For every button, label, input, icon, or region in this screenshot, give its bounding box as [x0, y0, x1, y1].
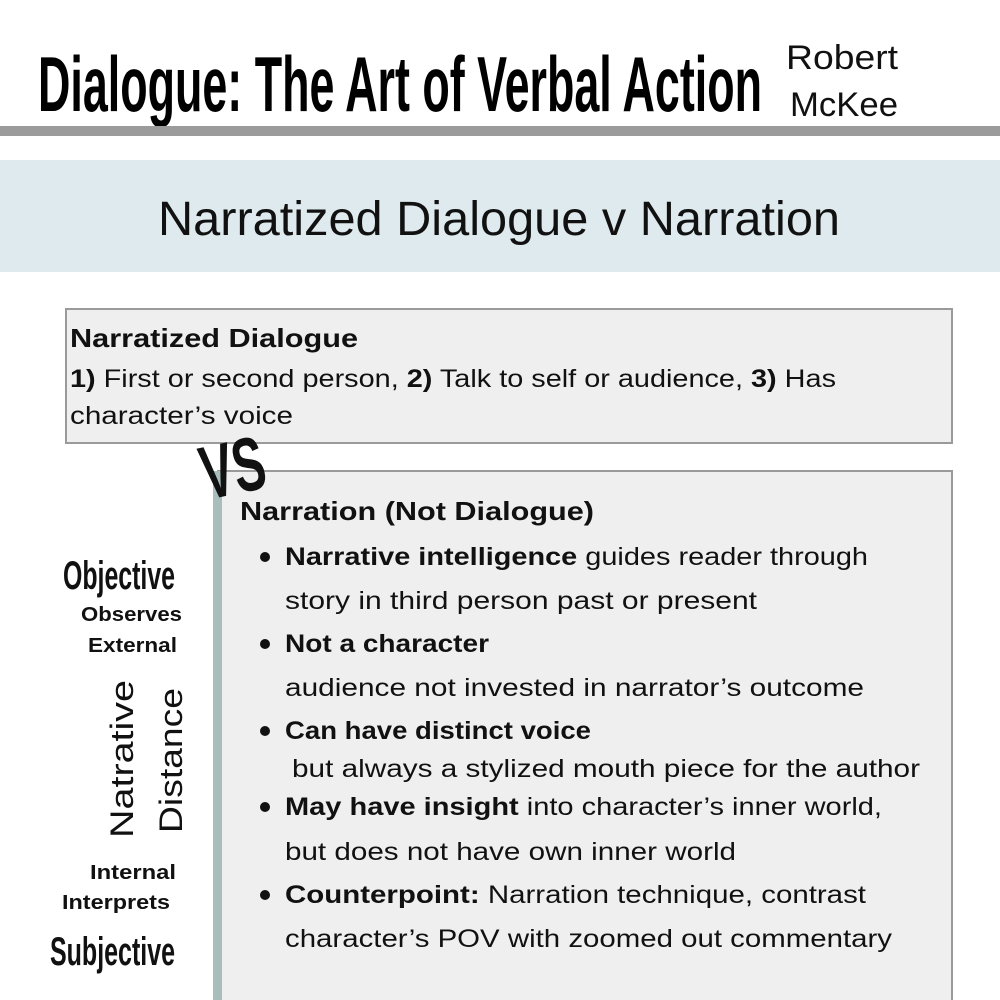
panel: narration: May have insight into character’s inner world,: [285, 793, 882, 821]
panel: narration: Counterpoint: Narration technique, contrast: [285, 881, 866, 909]
axis: narrative distance: Interprets: [62, 892, 170, 914]
panel: narratized dialogue: Narratized Dialogue: [70, 323, 358, 353]
panel: narration: but always a stylized mouth piece for the author: [292, 755, 920, 783]
author: [786, 39, 899, 124]
axis: narrative distance: Natrative: [104, 680, 140, 838]
VS label: VS: [193, 420, 273, 517]
axis: narrative distance: Objective: [63, 554, 175, 598]
panel: narration: but does not have own inner world: [285, 838, 736, 866]
axis: narrative distance: Subjective: [50, 930, 175, 974]
panel: narration: story in third person past or present: [285, 587, 757, 615]
subtitle band: Narratized Dialogue v Narration: [158, 193, 840, 246]
subtitle band: [0, 160, 1000, 272]
axis: narrative distance: [50, 554, 189, 974]
panel: narratized dialogue: character’s voice: [70, 402, 293, 430]
axis: narrative distance: Observes: [81, 604, 182, 626]
panel: narration: [213, 471, 952, 1000]
panel: narratized dialogue: 1) First or second person, 2) Talk to self or audience, 3) Has: [70, 365, 836, 393]
panel: narratized dialogue: [66, 309, 952, 443]
panel: narration: Not a character: [285, 630, 489, 658]
panel: narration: Narrative intelligence guides reader through: [285, 543, 868, 571]
panel: narration: audience not invested in narrator’s outcome: [285, 674, 864, 702]
author: McKee: [790, 86, 898, 124]
panel: narration: Narration (Not Dialogue): [240, 496, 594, 526]
panel: narration: character’s POV with zoomed out commentary: [285, 925, 893, 953]
axis: narrative distance: External: [88, 635, 177, 657]
axis: narrative distance: Internal: [90, 862, 176, 884]
panel: narration: Can have distinct voice: [285, 717, 591, 745]
author: Robert: [786, 39, 899, 77]
axis: narrative distance: Distance: [153, 688, 189, 833]
